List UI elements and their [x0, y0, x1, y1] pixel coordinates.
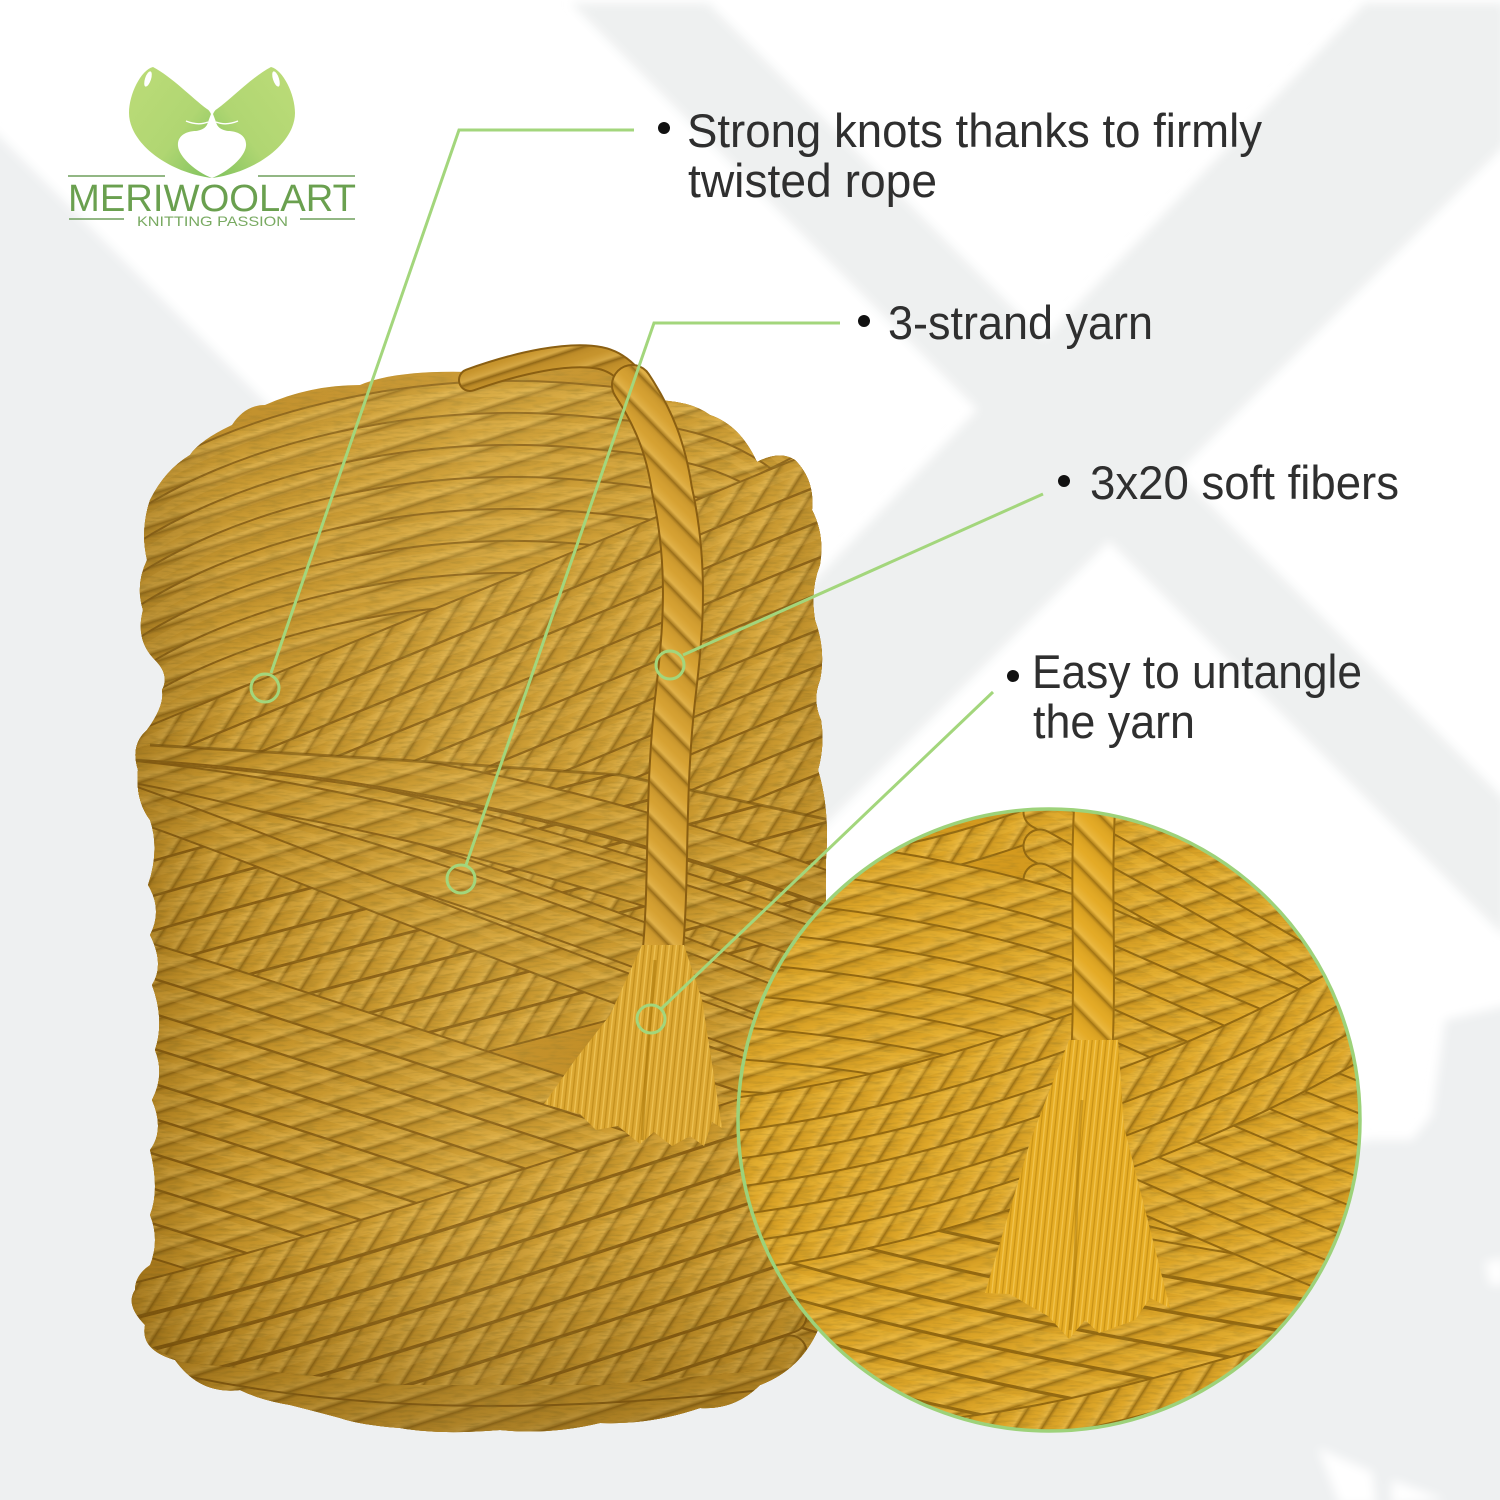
yarn spool: [132, 344, 827, 1432]
leader line 1: [251, 130, 634, 702]
callout text 1: [658, 104, 1262, 207]
rope tassel: [544, 945, 722, 1146]
callout text 4: the yarn: [1033, 695, 1195, 748]
close-up tassel: [985, 1040, 1170, 1339]
logo: [68, 67, 356, 229]
close-up rope windings: [740, 810, 1358, 1430]
callout: easy to untangle: [637, 645, 1362, 1033]
callout: strong knots: [251, 104, 1262, 702]
spool rope windings: [132, 368, 827, 1432]
callout text 3: 3x20 soft fibers: [1090, 456, 1399, 509]
callout text 4: Easy to untangle: [1032, 645, 1362, 698]
leader line 2: [447, 323, 840, 893]
hanging rope tail: [470, 356, 683, 960]
close-up circle outline: [738, 809, 1360, 1431]
close-up rope tail: [1092, 800, 1095, 1050]
logo mark: two facing animals forming a heart: [129, 67, 295, 178]
logo tagline: KNITTING PASSION: [137, 213, 288, 229]
callout text 1: twisted rope: [688, 154, 937, 207]
logo wordmark: MERIWOOLART: [68, 178, 356, 220]
leader line 3: [656, 494, 1043, 679]
callout text 1: Strong knots thanks to firmly: [687, 104, 1262, 157]
callout: soft fibers: [656, 456, 1399, 679]
inset: close-up of yarn: [736, 807, 1362, 1433]
callout text 2: 3-strand yarn: [888, 296, 1153, 349]
callout text 4: [1007, 645, 1362, 748]
callout: 3-strand yarn: [447, 296, 1153, 893]
leader line 4: [637, 692, 993, 1033]
